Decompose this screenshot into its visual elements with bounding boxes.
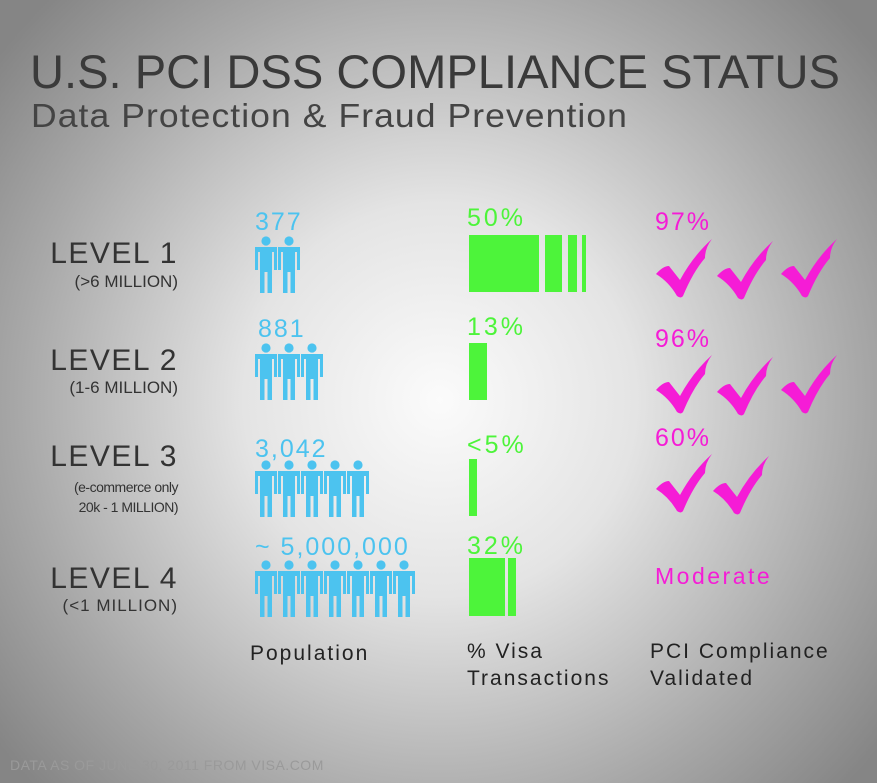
visa bar level 4: [467, 532, 526, 616]
level 4 label: LEVEL 4: [50, 562, 178, 595]
population level 3: [255, 435, 369, 517]
visa bar level 2: [467, 313, 526, 400]
column label visa: Transactions: [467, 667, 610, 690]
column label visa: [467, 640, 610, 690]
column label compliance: [650, 640, 830, 690]
footer source: DATA AS OF JUNE 30, 2011 FROM VISA.COM: [10, 757, 324, 773]
population level 1: 377: [255, 208, 303, 236]
level 1 label: [50, 237, 178, 291]
compliance level 1: [655, 208, 837, 300]
population level 4: [255, 533, 415, 617]
population level 2: [255, 315, 323, 400]
level 3 label: 20k - 1 MILLION): [79, 499, 178, 515]
compliance level 3: [655, 424, 769, 514]
column label compliance: Validated: [650, 667, 754, 690]
level 1 label: LEVEL 1: [50, 237, 178, 270]
compliance level 1: 97%: [655, 208, 711, 236]
compliance level 4: Moderate: [655, 563, 772, 589]
visa bar level 4: 32%: [467, 532, 526, 560]
visa bar level 3: [467, 431, 527, 516]
population level 2: 881: [258, 315, 306, 343]
level 3 label: (e-commerce only: [74, 479, 178, 495]
column label compliance: PCI Compliance: [650, 640, 830, 663]
level 1 label: (>6 MILLION): [75, 272, 178, 291]
column label population: Population: [250, 642, 369, 665]
visa bar level 1: 50%: [467, 204, 526, 232]
level 2 label: LEVEL 2: [50, 344, 178, 377]
population level 3: 3,042: [255, 435, 328, 463]
level 4 label: (<1 MILLION): [63, 596, 178, 615]
visa bar level 3: <5%: [467, 431, 527, 459]
population level 4: ~ 5,000,000: [255, 533, 410, 561]
column label visa: % Visa: [467, 640, 544, 663]
compliance level 2: [655, 325, 837, 416]
level 4 label: [50, 562, 178, 615]
compliance level 2: 96%: [655, 325, 711, 353]
compliance level 3: 60%: [655, 424, 711, 452]
level 3 label: [50, 440, 178, 515]
visa bar level 1: [467, 204, 586, 292]
subtitle: Data Protection & Fraud Prevention: [31, 97, 628, 134]
population level 1: [255, 208, 303, 293]
visa bar level 2: 13%: [467, 313, 526, 341]
title: U.S. PCI DSS COMPLIANCE STATUS: [30, 45, 840, 98]
level 3 label: LEVEL 3: [50, 440, 178, 473]
level 2 label: [50, 344, 178, 397]
level 2 label: (1-6 MILLION): [69, 378, 178, 397]
